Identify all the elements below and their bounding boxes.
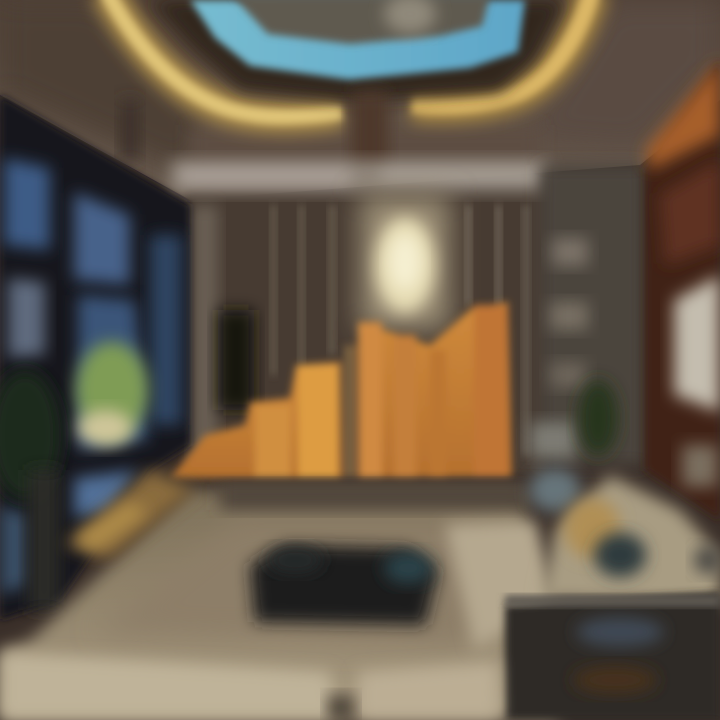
left plant xyxy=(0,370,61,500)
foreground cream sofa edge xyxy=(0,652,500,720)
ceiling xyxy=(0,0,720,200)
light horizontal beam xyxy=(170,160,548,192)
window pane right strip xyxy=(150,235,182,425)
dark coffee table xyxy=(505,592,720,720)
potted plant xyxy=(578,380,618,456)
left window wall xyxy=(0,95,190,620)
window pane mid left xyxy=(8,278,45,358)
cream sofa with cushions xyxy=(529,468,720,605)
right shelf column xyxy=(530,165,645,465)
right wood wall xyxy=(645,60,720,520)
lower pane xyxy=(74,470,138,518)
inner dark ceiling recess and blue ring xyxy=(150,0,565,102)
garden view xyxy=(76,342,148,438)
window pane upper left xyxy=(4,158,50,250)
orange bar-chart sculpture xyxy=(170,302,512,478)
gold cove light ring xyxy=(106,0,592,117)
glowing pendant lamp xyxy=(360,195,450,330)
framed picture xyxy=(674,275,720,412)
window pane upper middle xyxy=(74,192,130,285)
back wall with vertical stripes xyxy=(185,190,545,475)
window pane mid middle xyxy=(78,295,148,450)
floor and rug xyxy=(0,470,560,720)
central ceiling column xyxy=(352,92,388,172)
dark ottoman xyxy=(250,545,438,625)
